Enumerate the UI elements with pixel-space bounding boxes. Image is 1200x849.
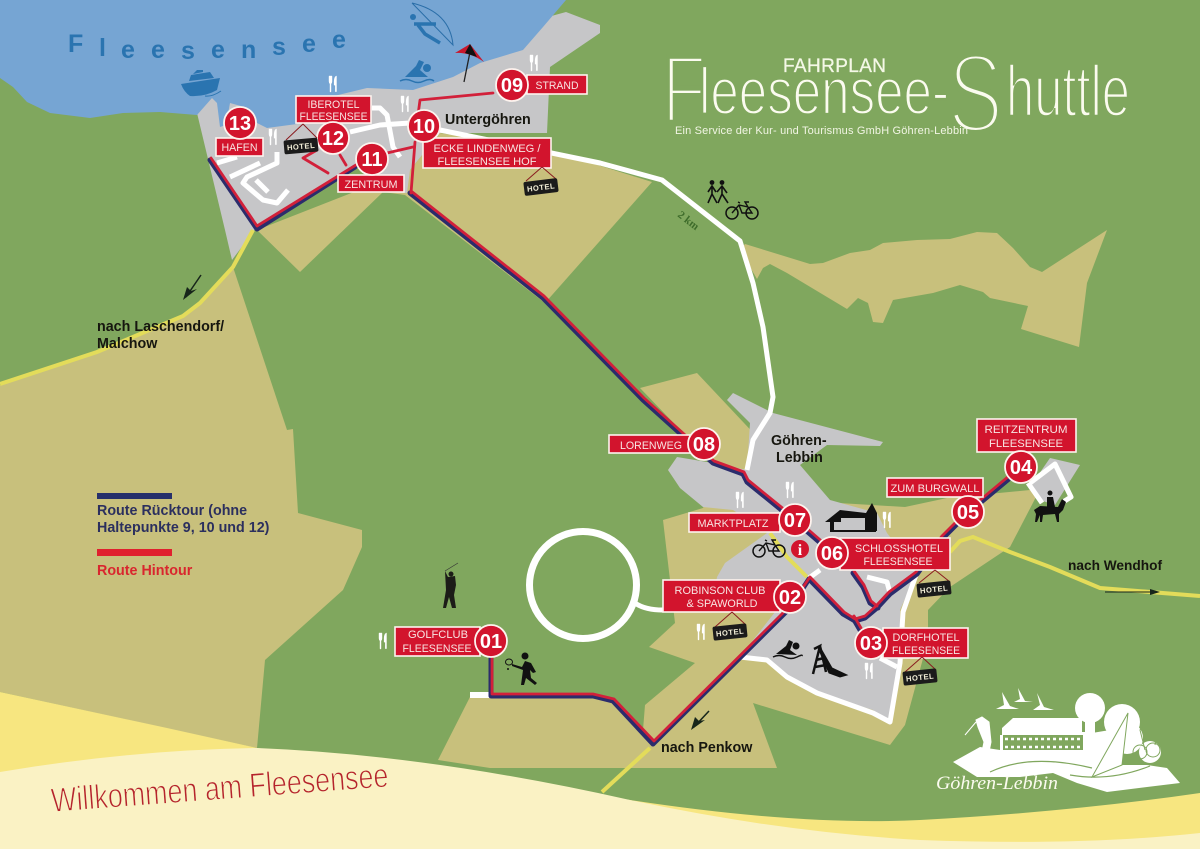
title: Fleesensee-Shuttle: S — [948, 31, 1003, 156]
icon: golfer — [443, 563, 458, 608]
legend: Route Hintour — [97, 563, 193, 579]
arrow to Penkow — [691, 711, 709, 730]
title: Fleesensee-Shuttle: F — [662, 36, 706, 143]
icon: walkers — [708, 181, 728, 203]
field: west khaki area — [0, 267, 362, 748]
stop 05 Zum Burgwall: 05 — [957, 502, 979, 524]
stop 07 Marktplatz: 07 — [784, 510, 806, 532]
land: Göhren-Lebbin village grey — [668, 393, 917, 722]
stop 10 Ecke Lindenweg / Fleesensee Hof: ECKE LINDENWEG / — [434, 143, 540, 155]
lake Fleesensee — [0, 0, 566, 128]
field: khaki area around Göhren-Lebbin — [640, 373, 1036, 768]
icon: horse rider — [1034, 490, 1066, 522]
logo: golfer — [965, 717, 991, 757]
stop 03 Dorfhotel Fleesensee: FLEESENSEE — [892, 645, 960, 657]
distance label 2 km: 2 km — [675, 209, 701, 233]
legend: Haltepunkte 9, 10 und 12) — [97, 520, 270, 536]
stop 02 Robinson Club and Spaworld: ROBINSON CLUB — [674, 585, 766, 597]
logo: birds — [996, 688, 1054, 710]
heading: Fahrplan: FAHRPLAN — [783, 56, 886, 77]
stop 06 Schlosshotel Fleesensee: 06 — [821, 543, 843, 565]
title: Fleesensee-Shuttle — [662, 31, 1130, 156]
stop 05 Zum Burgwall — [887, 478, 984, 528]
route: red and navy line — [210, 93, 1022, 744]
field: north khaki between villages — [257, 133, 652, 303]
hotel sign at stop 10 — [523, 167, 559, 196]
stop 09 Strand: STRAND — [536, 80, 579, 92]
hotel sign at stop 06 — [916, 570, 952, 598]
pale sand foreground — [0, 748, 1200, 849]
logo: sailboat — [1092, 713, 1128, 777]
legend — [97, 493, 270, 579]
yellow beach band — [0, 692, 1200, 849]
hotel sign at stop 12 — [283, 124, 319, 154]
stop 07 Marktplatz: MARKTPLATZ — [698, 518, 769, 530]
stop 11 Zentrum — [338, 143, 404, 192]
stop 12 Iberotel Fleesensee: FLEESENSEE — [300, 111, 368, 123]
logo: hills — [953, 730, 1180, 792]
hotel sign at stop 03 — [902, 657, 938, 686]
hotel sign at stop 03: HOTEL — [906, 672, 935, 683]
direction label Laschendorf Malchow: Malchow — [97, 336, 158, 352]
hotel sign at stop 10: HOTEL — [527, 181, 556, 194]
stop 06 Schlosshotel Fleesensee — [816, 537, 950, 570]
stop 09 Strand — [496, 69, 587, 101]
stop 06 Schlosshotel Fleesensee: FLEESENSEE — [864, 556, 932, 568]
icon: swimmer in lake — [400, 60, 434, 82]
stop 05 Zum Burgwall: ZUM BURGWALL — [890, 483, 980, 495]
direction label Laschendorf Malchow: nach Laschendorf/ — [97, 319, 224, 335]
icon: playground slide — [813, 646, 847, 677]
stop 04 Reitzentrum Fleesensee — [977, 419, 1076, 483]
land: riding centre grey — [1030, 458, 1080, 505]
icon: beach umbrella — [455, 44, 484, 82]
stop 10 Ecke Lindenweg / Fleesensee Hof: FLEESENSEE HOF — [438, 156, 537, 168]
stop 12 Iberotel Fleesensee — [296, 96, 371, 154]
field: northeast khaki strip — [740, 230, 1107, 347]
icon: cruise ship — [181, 70, 221, 96]
stop 07 Marktplatz — [689, 504, 811, 536]
logo: trees behind castle — [1075, 693, 1161, 763]
logo: castle — [1002, 703, 1095, 750]
stop 02 Robinson Club and Spaworld: 02 — [779, 587, 801, 609]
hotel sign at stop 06: HOTEL — [920, 584, 949, 595]
icon: information point — [791, 540, 809, 559]
stop 10 Ecke Lindenweg / Fleesensee Hof — [408, 110, 551, 168]
stop 12 Iberotel Fleesensee: 12 — [322, 128, 344, 150]
field: khaki area south of the golf course — [438, 695, 653, 768]
logo: cyclist — [1133, 715, 1160, 759]
direction label Laschendorf Malchow — [97, 319, 224, 352]
stop 04 Reitzentrum Fleesensee: FLEESENSEE — [989, 438, 1063, 450]
stop 08 Lorenweg — [609, 428, 720, 460]
stop 13 Hafen: HAFEN — [222, 142, 258, 154]
stop 01 Golfclub Fleesensee — [395, 625, 507, 657]
hotel sign at stop 02 — [712, 612, 748, 641]
hotel sign at stop 02: HOTEL — [716, 627, 745, 638]
stop 02 Robinson Club and Spaworld: & SPAWORLD — [686, 598, 758, 610]
land: Untergöhren village grey — [197, 12, 600, 260]
stop 12 Iberotel Fleesensee: IBEROTEL — [308, 99, 360, 111]
welcome text: Willkommen am Fleesensee — [50, 757, 390, 820]
logo lettering: Göhren-Lebbin — [936, 773, 1058, 794]
stop 04 Reitzentrum Fleesensee: REITZENTRUM — [984, 424, 1068, 436]
stop 13 Hafen — [216, 107, 263, 156]
stop 10 Ecke Lindenweg / Fleesensee Hof: 10 — [413, 116, 435, 138]
stop 01 Golfclub Fleesensee: GOLFCLUB — [408, 629, 468, 641]
lake name: Fleesensee — [68, 26, 346, 65]
stop 04 Reitzentrum Fleesensee: 04 — [1010, 457, 1033, 479]
stop 08 Lorenweg: 08 — [693, 434, 715, 456]
icon: tennis player — [506, 652, 537, 685]
subtitle: Ein Service der Kur- und Tourismus GmbH Göhren-Lebbin — [675, 125, 968, 137]
stop 01 Golfclub Fleesensee: FLEESENSEE — [402, 643, 472, 655]
arrow to Laschendorf — [183, 275, 201, 300]
hotel sign at stop 12: HOTEL — [287, 141, 315, 152]
direction label Penkow: nach Penkow — [661, 740, 753, 756]
icon: bicycle at footpath — [726, 202, 758, 219]
stop 02 Robinson Club and Spaworld — [663, 580, 806, 613]
logo Göhren-Lebbin — [936, 688, 1180, 794]
legend: Route Rücktour (ohne — [97, 503, 247, 519]
yellow through roads — [0, 230, 1200, 792]
stop 01 Golfclub Fleesensee: 01 — [480, 631, 502, 653]
icon: information point: i — [798, 542, 803, 559]
stop 03 Dorfhotel Fleesensee: 03 — [860, 633, 882, 655]
logo: swoosh details — [990, 761, 1150, 777]
place name Untergöhren: Untergöhren — [445, 112, 531, 128]
icon: castle — [825, 503, 877, 532]
stop 03 Dorfhotel Fleesensee: DORFHOTEL — [892, 632, 960, 644]
arrow to Wendhof — [1105, 589, 1160, 595]
icons: restaurant cutlery — [270, 55, 890, 678]
icon: bicycle at Marktplatz — [753, 540, 785, 557]
stop 11 Zentrum: 11 — [361, 149, 383, 171]
title: Fleesensee-Shuttle: leesensee- — [699, 54, 949, 128]
title: Fleesensee-Shuttle: huttle — [1006, 52, 1130, 132]
stop 11 Zentrum: ZENTRUM — [344, 179, 398, 191]
stop 09 Strand: 09 — [501, 75, 523, 97]
stop 13 Hafen: 13 — [229, 113, 251, 135]
place name Göhren-Lebbin — [771, 433, 827, 466]
place name Göhren-Lebbin: Lebbin — [776, 450, 823, 466]
place name Göhren-Lebbin: Göhren- — [771, 433, 827, 449]
white streets and footpaths — [217, 108, 1071, 722]
stop 06 Schlosshotel Fleesensee: SCHLOSSHOTEL — [855, 543, 943, 555]
icon: swimmer at spaworld — [773, 640, 802, 658]
direction label Wendhof: nach Wendhof — [1068, 558, 1162, 573]
icon: windsurfer — [410, 3, 453, 45]
stop 08 Lorenweg: LORENWEG — [620, 440, 682, 452]
stop 03 Dorfhotel Fleesensee — [855, 627, 968, 659]
